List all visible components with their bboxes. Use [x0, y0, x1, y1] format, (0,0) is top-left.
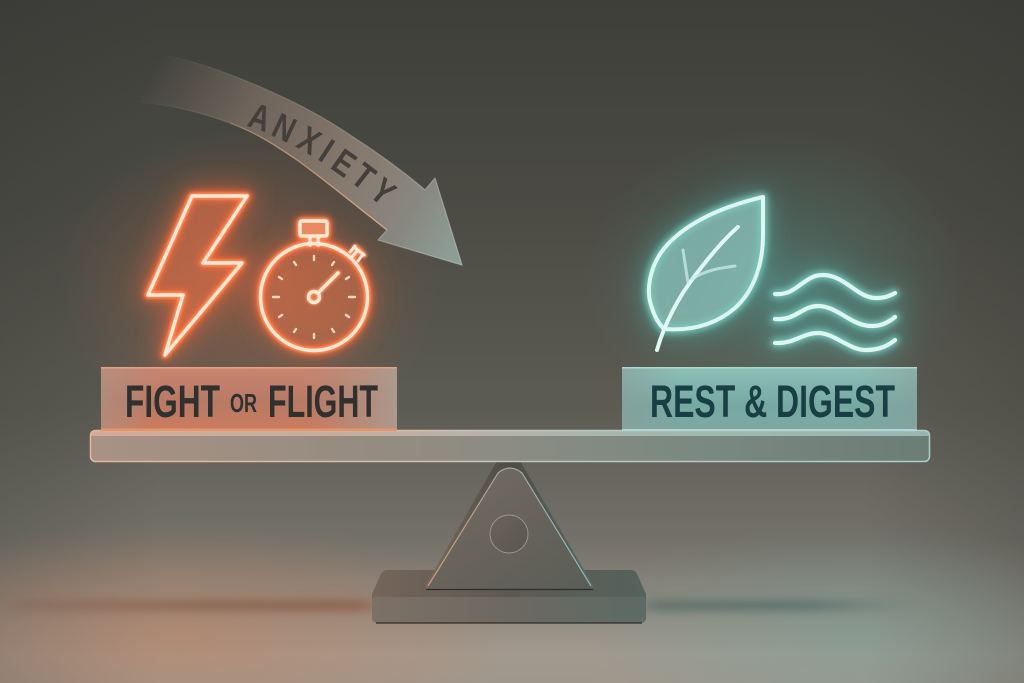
label box: fight or flight	[101, 367, 397, 431]
arrow: anxiety pressing down	[140, 55, 462, 265]
arrow label: ANXIETY: A	[244, 94, 276, 140]
icon: stopwatch	[254, 221, 374, 357]
pivot disc	[490, 515, 528, 553]
icon: waves	[775, 275, 895, 350]
arrow label: ANXIETY: N	[266, 105, 302, 150]
label box: rest and digest: REST & DIGEST	[650, 376, 895, 427]
label box: fight or flight: FLIGHT	[268, 376, 378, 427]
icon: lightning bolt	[148, 196, 247, 355]
icon: leaf	[649, 197, 763, 350]
base plate	[372, 570, 646, 623]
label box: fight or flight: FIGHT	[125, 376, 220, 427]
label box: rest and digest	[622, 367, 917, 431]
arrow label: ANXIETY: E	[325, 140, 364, 185]
beam	[90, 430, 930, 462]
arrow label: ANXIETY: I	[312, 131, 341, 170]
label box: fight or flight: OR	[230, 388, 257, 418]
stand: fulcrum and base	[372, 461, 646, 623]
arrow label: ANXIETY	[244, 94, 404, 213]
fulcrum triangle	[426, 461, 593, 590]
arrow label: ANXIETY: T	[344, 154, 383, 198]
arrow label: ANXIETY: X	[291, 118, 328, 163]
arrow label: ANXIETY: Y	[363, 169, 404, 213]
